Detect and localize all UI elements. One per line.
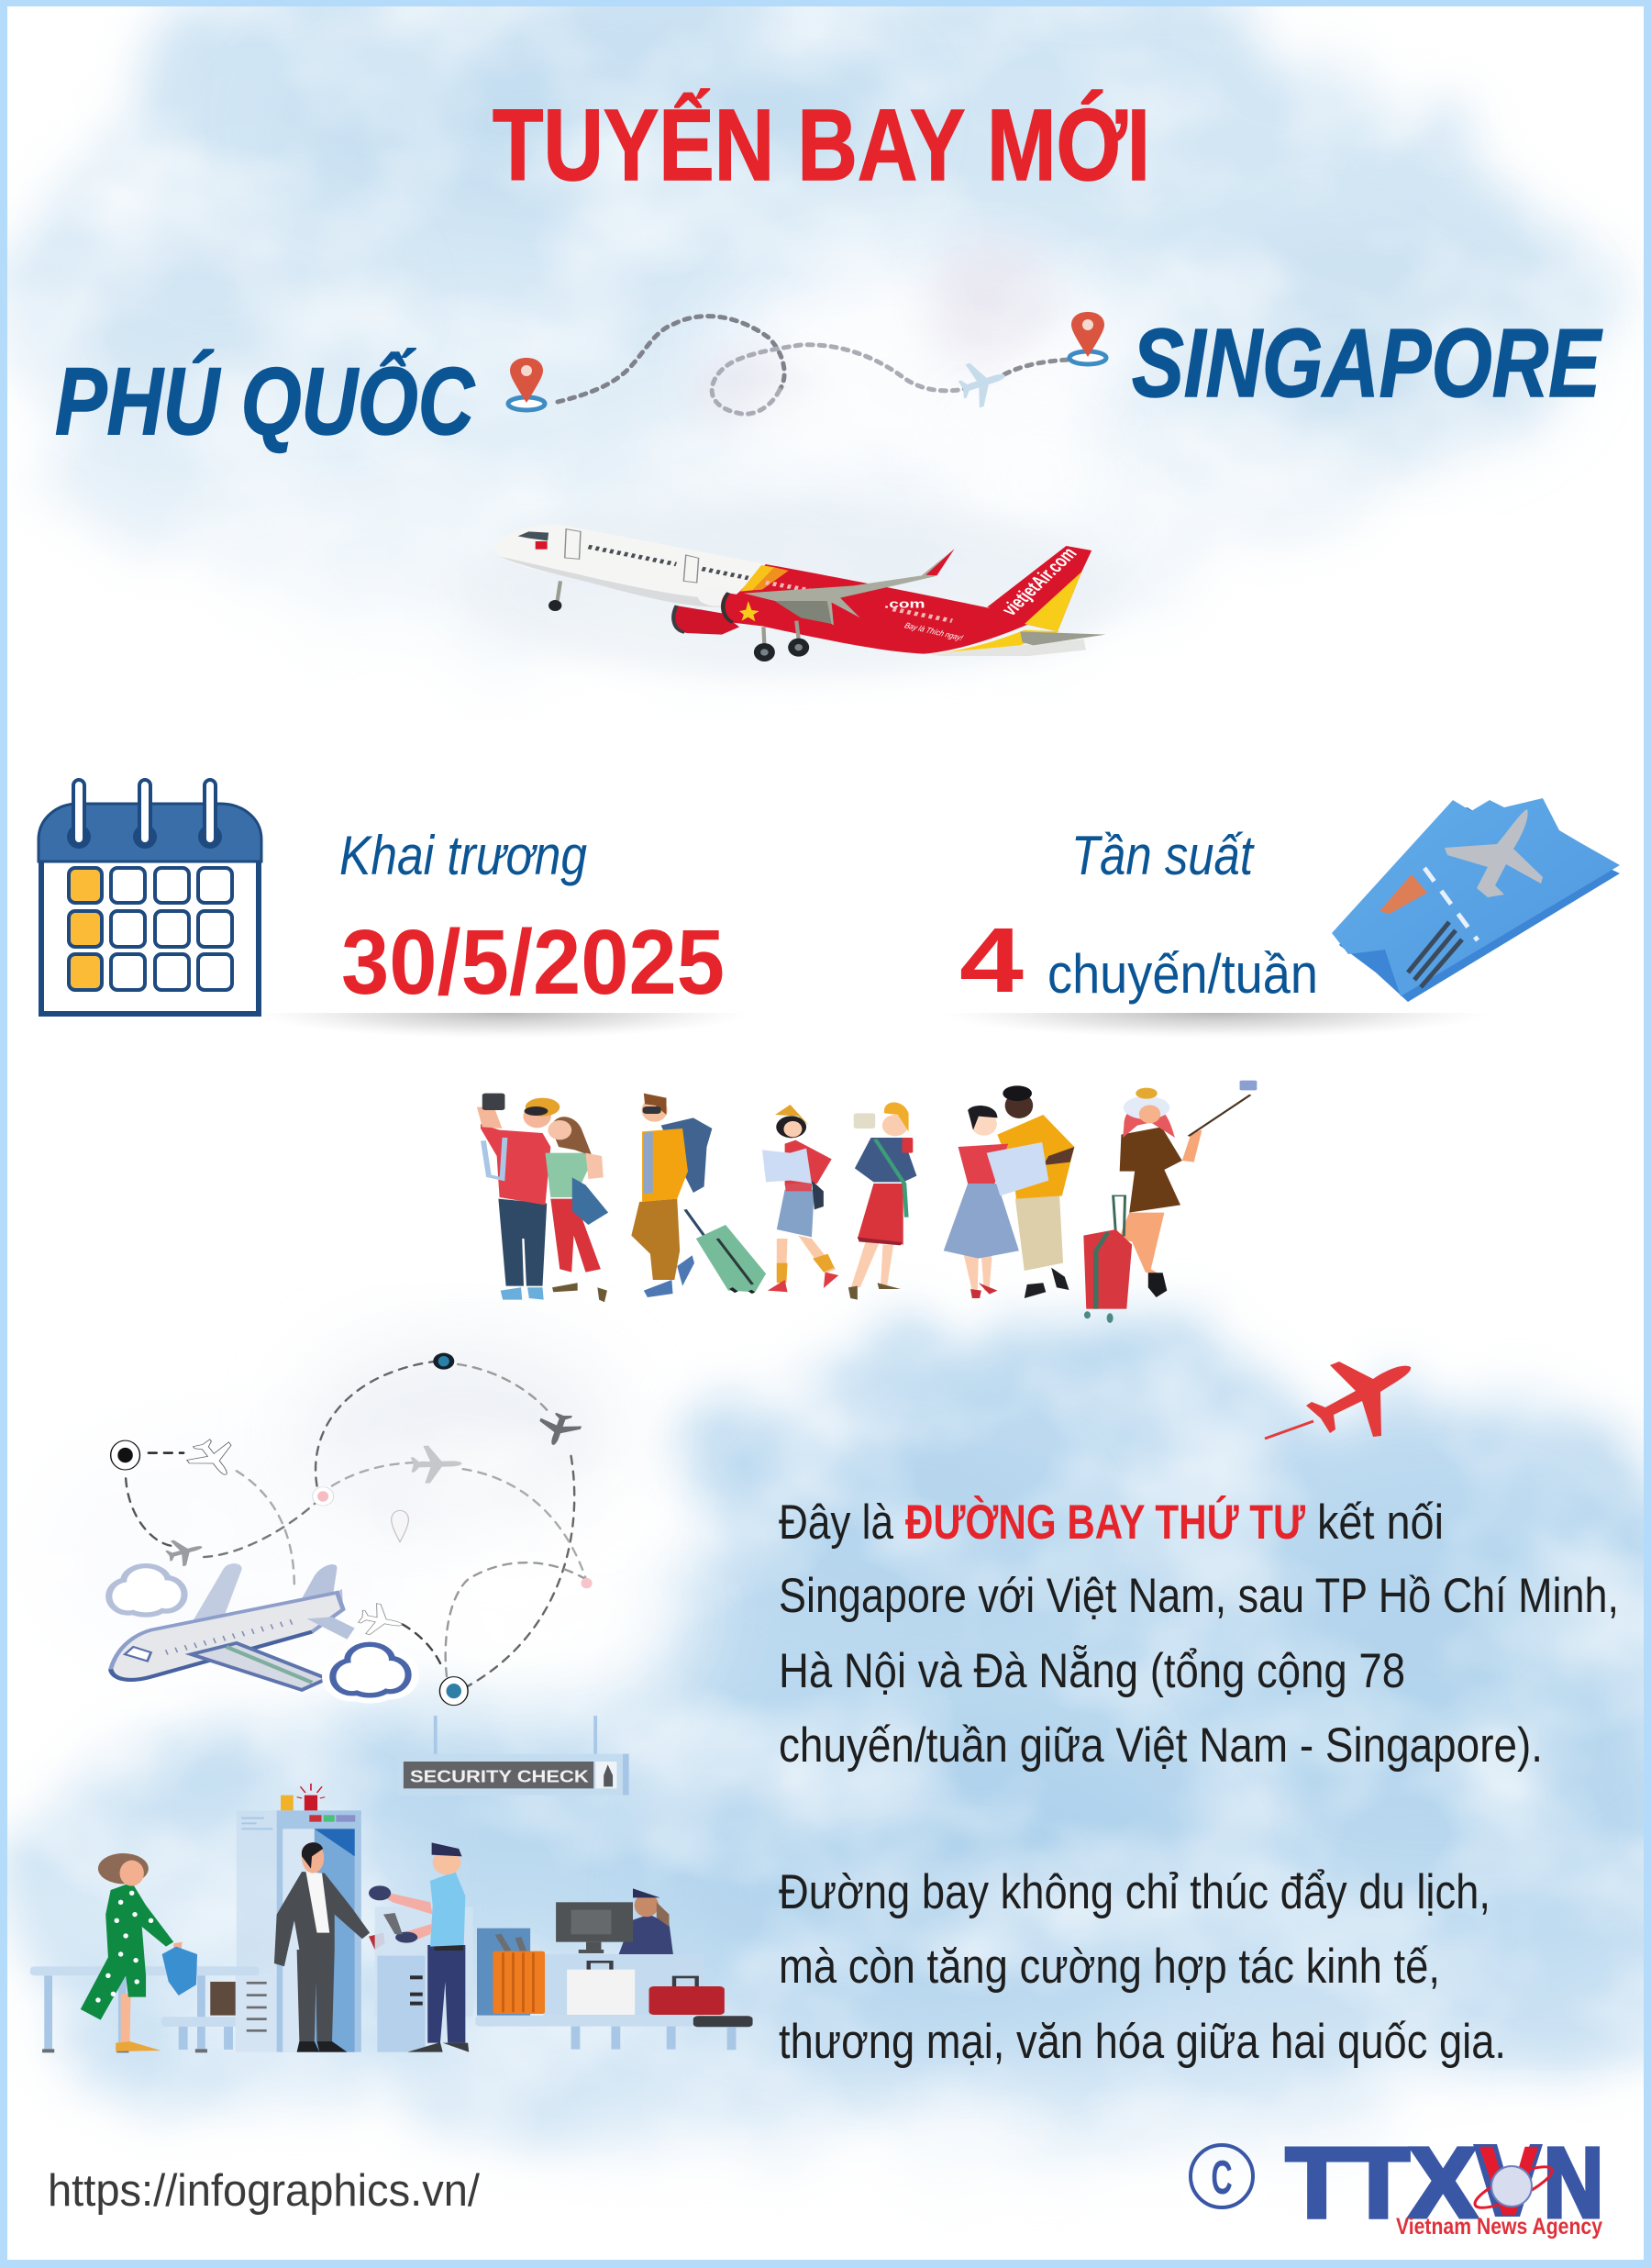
security sign [397,1716,629,1796]
icon: origin pin [508,358,545,410]
logo: TTXVN Vietnam News Agency: N [1544,2127,1603,2238]
icon: small plane on route [954,354,1012,411]
traveller: woman with tote bag [545,1117,608,1302]
title: TUYẾN BAY MỚI [493,89,1150,202]
security officer [369,1842,473,2052]
icon: destination pin [1069,312,1106,364]
shadow under frequency [989,1013,1442,1034]
illustration: airport security check [30,1716,753,2052]
luggage on belt [477,1929,725,2016]
icon: cloud right [336,1647,405,1693]
logo: TTXVN Vietnam News Agency: V [1479,2125,1539,2236]
metal detector gate with alarm lights [237,1784,361,2052]
frequency number: 4 [959,909,1024,1012]
icon: blue boarding pass with airplane [1332,798,1620,1002]
icon: cloud left [112,1568,181,1612]
opening date: 30/5/2025 [341,911,725,1014]
paragraph 1: ĐƯỜNG BAY THỨ TƯ [905,1495,1305,1550]
paragraph 1 [779,1495,1619,1773]
icon: calendar [39,780,261,1014]
travellers: couple reading a map [944,1085,1074,1298]
tail fin: vietjetAir.com [996,545,1082,618]
body text [779,1495,1619,2069]
x-ray monitor and operator [556,1888,673,1954]
paragraph 2: Đường bay không chỉ thúc đẩy du lịch, [779,1865,1490,1919]
logo: TTXVN Vietnam News Agency: Vietnam News Agency [1396,2214,1602,2240]
traveller: woman with selfie stick and red suitcase [1083,1081,1257,1323]
illustration: group of travellers [477,1081,1257,1323]
woman in green dress [81,1853,197,2051]
conveyor and X-ray body [161,1975,753,2052]
frequency unit: chuyến/tuần [1047,943,1318,1005]
copyright mark [1191,2145,1253,2207]
logo: TTXVN Vietnam News Agency: TTX [1286,2127,1477,2238]
paragraph 1: kết nối [1317,1495,1444,1550]
cartoon aircraft [111,1563,355,1690]
dotted flight route with pins [508,312,1106,414]
traveller: woman with map [762,1105,838,1292]
airplane on ticket [1445,809,1543,897]
paragraph 1: Hà Nội và Đà Nẵng (tổng cộng 78 [779,1644,1405,1698]
paragraph 2: mà còn tăng cường hợp tác kinh tế, [779,1940,1440,1994]
far engine [672,606,739,635]
paragraph 1: Đây là [779,1495,893,1550]
label: Tần suất: Tần suất [1071,825,1255,886]
Vietjet aircraft photo: .com [884,597,925,611]
tail fin [987,545,1091,631]
security sign: SECURITY CHECK [410,1767,589,1786]
dashed routes [126,1361,586,1686]
wing [744,549,954,626]
paragraph 1: chuyến/tuần giữa Việt Nam - Singapore). [779,1718,1543,1773]
Vietjet aircraft photo: Bay là Thích ngay! [903,621,964,643]
paragraph 2: thương mại, văn hóa giữa hai quốc gia. [779,2015,1506,2069]
illustration: flight routes and cartoon aircraft [111,1353,593,1706]
route nodes [111,1353,593,1706]
label: Khai trương: Khai trương [339,825,587,886]
landing gear [548,581,809,662]
logo: TTXVN Vietnam News Agency [1286,2125,1603,2240]
paragraph 2 [779,1865,1506,2069]
near engine [721,593,775,628]
shadow under date [299,1013,706,1034]
traveller: girl with phone [848,1102,916,1300]
source url: https://infographics.vn/ [48,2166,480,2216]
traveller: man with camera [477,1094,560,1300]
businessman in suit [274,1842,385,2052]
left inspection table [30,1966,259,2052]
copyright mark: C [1211,2151,1233,2205]
origin label: Phú Quốc: PHÚ QUỐC [55,348,476,455]
Vietjet aircraft photo [459,502,1125,679]
route planes [181,1434,247,1484]
traveller: backpacker with green suitcase [631,1094,766,1297]
icon: red airplane with trail [1265,1362,1411,1439]
